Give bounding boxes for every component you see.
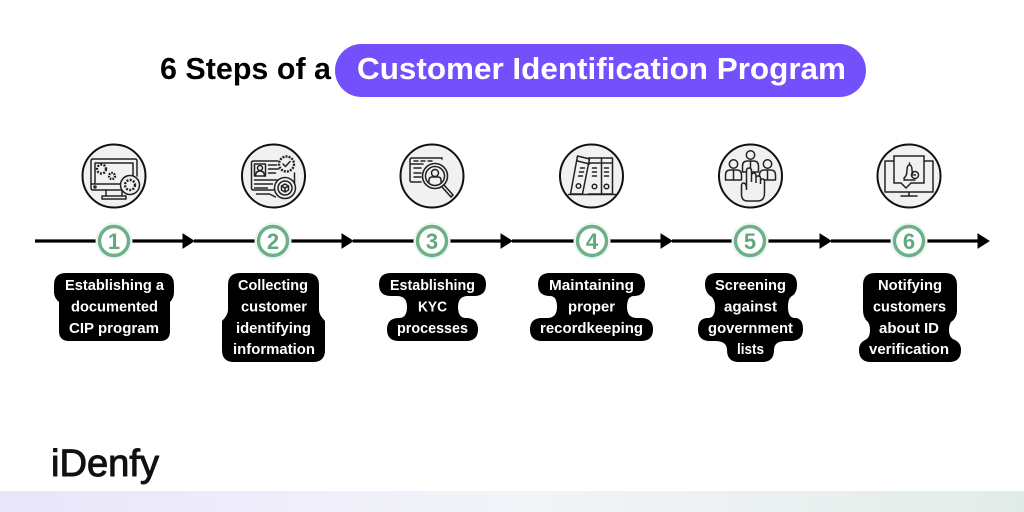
title: [160, 44, 866, 97]
step 1 number: [96, 222, 132, 260]
label: step 3: processes: [397, 321, 468, 337]
label: step 3: KYC: [418, 300, 447, 316]
icon: document magnifier: [400, 144, 464, 208]
label: step 5: government: [708, 321, 793, 337]
label: step 6: Notifying: [878, 278, 942, 294]
step 6 number: 6: [903, 229, 915, 254]
label: step 5: lists: [737, 342, 764, 358]
icon: monitor with bell notification: [878, 144, 940, 208]
label: step 2: information: [233, 342, 315, 358]
step 6 number: [890, 222, 928, 260]
label: step 2: customer: [241, 300, 307, 316]
label: step 1: CIP program: [69, 321, 159, 337]
step 2 number: [254, 222, 292, 260]
label: step 6: verification: [869, 342, 949, 358]
step 1 number: 1: [108, 229, 120, 254]
step 4 number: [574, 222, 610, 260]
label: step 4: recordkeeping: [540, 321, 643, 337]
title lead text: 6 Steps of a: [160, 51, 332, 86]
step 5 number: 5: [744, 229, 756, 254]
label: step 5: Screening: [715, 278, 786, 294]
label: step 2: identifying: [236, 321, 311, 337]
step 4 number: 4: [586, 229, 599, 254]
step 2 number: 2: [267, 229, 279, 254]
label: step 3: [379, 273, 486, 341]
timeline arrows: [35, 234, 989, 248]
label: step 6: customers: [873, 300, 946, 316]
step 5 number: [732, 222, 768, 260]
label: step 4: [530, 273, 653, 341]
icon: binders on shelf: [560, 144, 623, 208]
label: step 6: [859, 273, 961, 362]
label: step 4: Maintaining: [549, 278, 634, 294]
label: step 1: documented: [71, 300, 158, 316]
step 3 number: 3: [426, 229, 438, 254]
step 3 number: [414, 222, 450, 260]
icon: ID card with shield: [242, 144, 305, 208]
title highlight pill: [335, 44, 866, 97]
title highlight text: Customer Identification Program: [357, 51, 846, 86]
label: step 3: Establishing: [390, 278, 475, 294]
logo: iDenfy: iDenfy: [51, 443, 159, 485]
label: step 5: against: [724, 300, 777, 316]
icon: monitor with gears: [82, 144, 146, 208]
footer band: [0, 491, 1024, 512]
label: step 2: Collecting: [238, 278, 308, 294]
label: step 6: about ID: [879, 321, 939, 337]
label: step 4: proper: [568, 300, 615, 316]
label: step 1: [54, 273, 174, 341]
label: step 2: [222, 273, 325, 362]
icon: people with pointing hand: [719, 144, 782, 208]
label: step 5: [698, 273, 803, 362]
label: step 1: Establishing a: [65, 278, 165, 294]
